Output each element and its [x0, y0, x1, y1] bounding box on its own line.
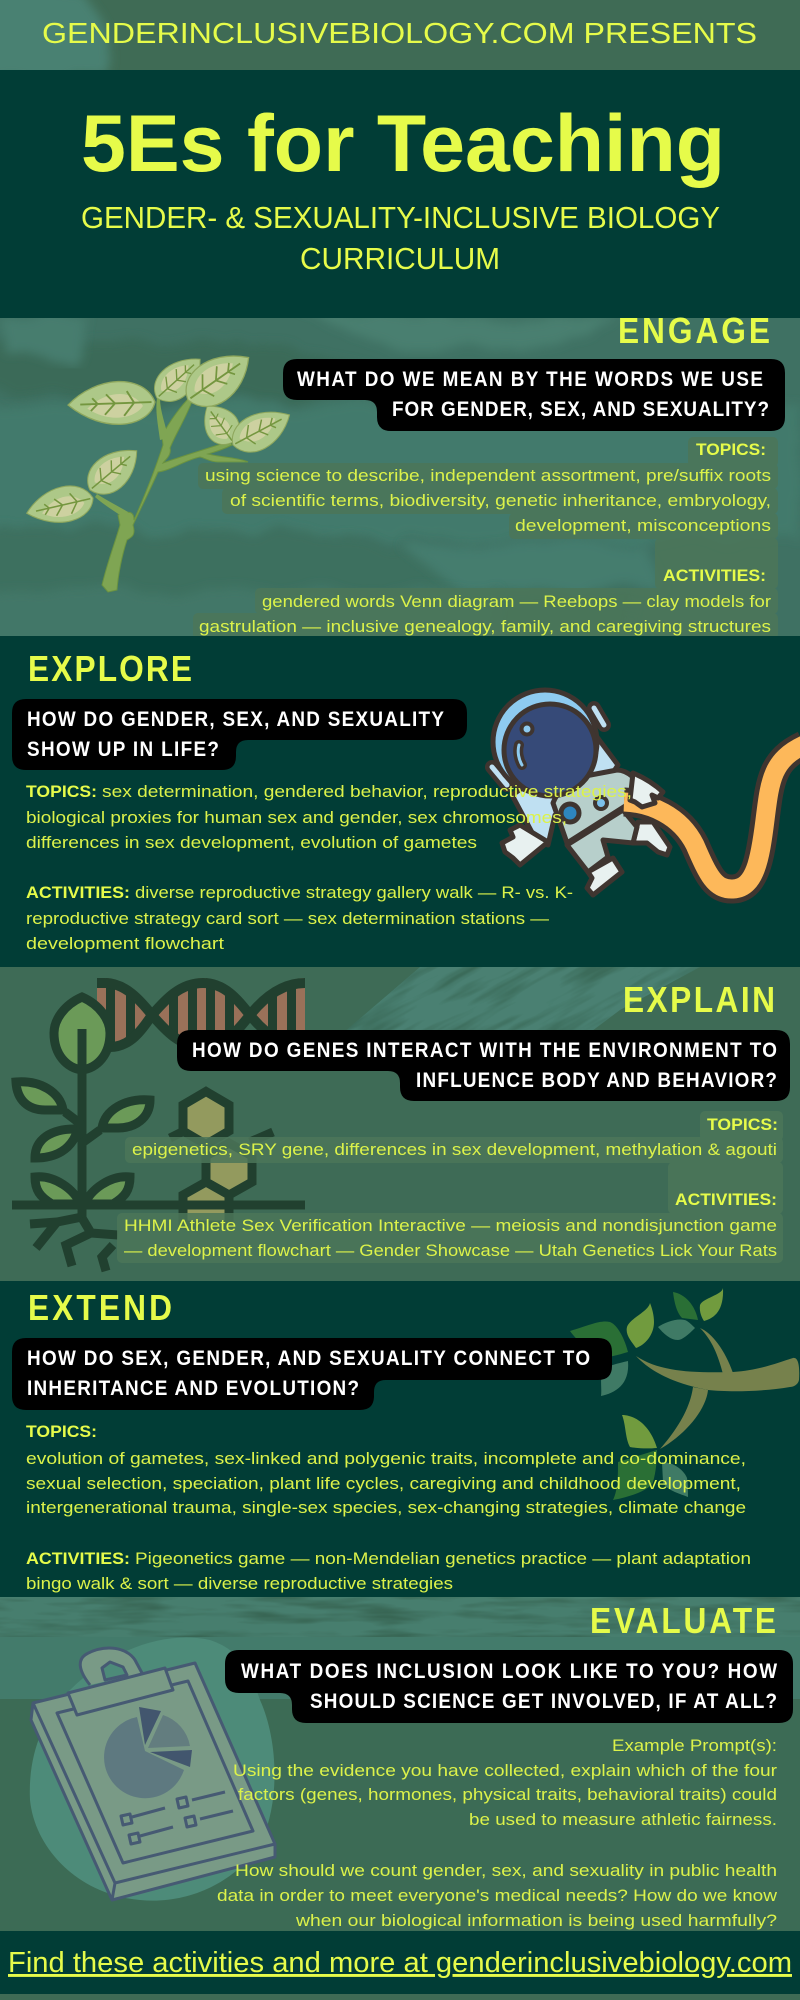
text block: example prompts: data in order to meet everyone's medical needs? How do we know [217, 1886, 778, 1905]
callout: evaluate question [225, 1650, 793, 1723]
text block: extend activities: bingo walk & sort — diverse reproductive strategies [26, 1574, 453, 1593]
subtitle: CURRICULUM [300, 242, 500, 276]
text block: extend activities [26, 1549, 751, 1593]
callout: engage question [283, 359, 785, 431]
heading: explain: EXPLAIN [623, 980, 775, 1020]
icon: plant with DNA and hexagons [12, 975, 305, 1271]
text block: engage topics and activities [193, 437, 778, 639]
text block: explore activities: ACTIVITIES: [26, 883, 130, 902]
heading: extend: EXTEND [28, 1288, 172, 1328]
panel: footer call to action [0, 1931, 800, 2000]
heading: presents line: GENDERINCLUSIVEBIOLOGY.COM PRESENTS [42, 18, 757, 50]
callout: explain question [177, 1030, 790, 1101]
callout: explore question [12, 699, 467, 770]
text block: extend topics [26, 1422, 746, 1517]
panel: explain [0, 967, 800, 1281]
icon: leafy sprout [23, 340, 298, 592]
text block: explain topics and activities: ACTIVITIES: [675, 1190, 777, 1209]
footer link text: Find these activities and more at genderinclusivebiology.com [8, 1947, 792, 1979]
text block: engage topics and activities: ACTIVITIES: [663, 566, 766, 585]
text block: explore topics: sex determination, gendered behavior, reproductive strategies, [102, 782, 632, 801]
text block: explore activities: development flowchart [26, 934, 224, 953]
text block: engage topics and activities: gendered words Venn diagram — Reebops — clay models for [262, 592, 771, 611]
text block: extend topics: sexual selection, speciation, plant life cycles, caregiving and childhood development, [26, 1474, 741, 1493]
text block: engage topics and activities: development, misconceptions [515, 516, 771, 535]
text block: explain topics and activities: TOPICS: [707, 1115, 778, 1134]
text block: explore topics: TOPICS: [26, 782, 97, 801]
text block: extend topics: evolution of gametes, sex-linked and polygenic traits, incomplete and co-dominance, [26, 1449, 746, 1468]
text block: engage topics and activities: of scientific terms, biodiversity, genetic inheritance, embryology, [230, 491, 771, 510]
text block: explain topics and activities: HHMI Athlete Sex Verification Interactive — meiosis and nondisjunction game [124, 1216, 777, 1235]
panel: engage [0, 311, 800, 660]
panel: extend [0, 1281, 800, 1597]
text block: explore activities: diverse reproductive strategy gallery walk — R- vs. K- [135, 883, 573, 902]
callout: explore question: SHOW UP IN LIFE? [27, 738, 219, 761]
text block: example prompts: be used to measure athletic fairness. [469, 1810, 777, 1829]
icon: branch with leaves [570, 1288, 799, 1500]
text block: example prompts: Example Prompt(s): [612, 1736, 777, 1755]
title: 5Es for Teaching [81, 99, 725, 189]
text block: engage topics and activities: TOPICS: [696, 440, 766, 459]
heading: engage: ENGAGE [618, 311, 770, 351]
heading: explore: EXPLORE [28, 649, 192, 689]
panel: explore [0, 636, 800, 967]
text block: explain topics and activities [117, 1111, 783, 1263]
text block: extend activities: ACTIVITIES: [26, 1549, 130, 1568]
text block: engage topics and activities: gastrulation — inclusive genealogy, family, and caregiving structures [199, 617, 771, 636]
callout: extend question [12, 1338, 612, 1410]
text block: extend activities: Pigeonetics game — non-Mendelian genetics practice — plant adaptation [135, 1549, 751, 1568]
icon: clipboard with pie chart [30, 1637, 275, 1901]
text block: explore activities: reproductive strategy card sort — sex determination stations — [26, 909, 549, 928]
text block: extend topics: intergenerational trauma, single-sex species, sex-changing strategies, climate change [26, 1498, 746, 1517]
callout: evaluate question: SHOULD SCIENCE GET INVOLVED, IF AT ALL? [310, 1690, 777, 1713]
text block: explore topics [26, 782, 632, 852]
callout: explain question: HOW DO GENES INTERACT WITH THE ENVIRONMENT TO [192, 1039, 777, 1062]
text block: example prompts: How should we count gender, sex, and sexuality in public health [235, 1861, 777, 1880]
callout: extend question: HOW DO SEX, GENDER, AND SEXUALITY CONNECT TO [27, 1347, 590, 1370]
subtitle: GENDER- & SEXUALITY-INCLUSIVE BIOLOGY [81, 201, 720, 235]
text block: explain topics and activities: epigenetics, SRY gene, differences in sex development, methylation & agouti [132, 1140, 777, 1159]
callout: extend question: INHERITANCE AND EVOLUTION? [27, 1377, 359, 1400]
text block: example prompts: Using the evidence you have collected, explain which of the four [233, 1761, 777, 1780]
callout: engage question: WHAT DO WE MEAN BY THE WORDS WE USE [297, 368, 763, 391]
callout: evaluate question: WHAT DOES INCLUSION LOOK LIKE TO YOU? HOW [241, 1660, 777, 1683]
text block: extend topics: TOPICS: [26, 1422, 97, 1441]
icon: astronaut with tether [492, 690, 800, 895]
callout: explore question: HOW DO GENDER, SEX, AND SEXUALITY [27, 708, 444, 731]
text block: example prompts: factors (genes, hormones, physical traits, behavioral traits) could [238, 1785, 777, 1804]
text block: engage topics and activities: using science to describe, independent assortment, pre/suffix roots [205, 466, 771, 485]
callout: explain question: INFLUENCE BODY AND BEHAVIOR? [416, 1069, 777, 1092]
callout: engage question: FOR GENDER, SEX, AND SEXUALITY? [392, 398, 769, 421]
panel: evaluate [0, 1597, 800, 1931]
heading: evaluate: EVALUATE [590, 1601, 776, 1641]
text block: example prompts: when our biological information is being used harmfully? [295, 1911, 777, 1930]
text block: explain topics and activities: — development flowchart — Gender Showcase — Utah Genetics Lick Your Rats [124, 1241, 777, 1260]
text block: example prompts [217, 1736, 778, 1930]
text block: explore topics: differences in sex development, evolution of gametes [26, 833, 477, 852]
subtitle [81, 201, 720, 276]
text block: explore topics: biological proxies for human sex and gender, sex chromosomes, [26, 808, 567, 827]
text block: explore activities [26, 883, 573, 953]
panel: page header strip [0, 0, 800, 70]
panel: title block [0, 70, 800, 318]
